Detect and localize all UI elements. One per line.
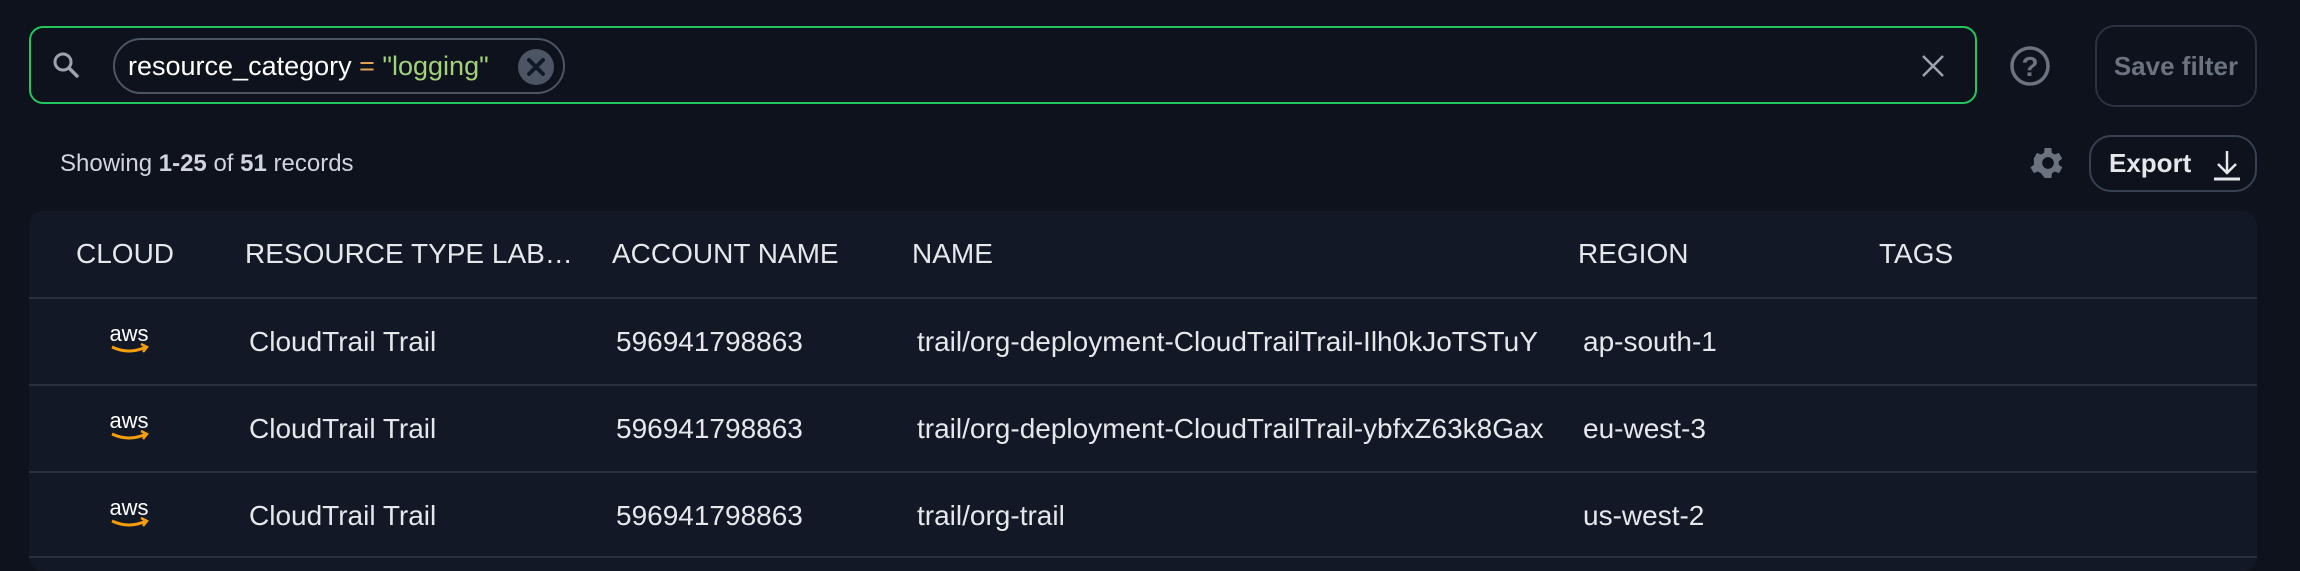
row 2: CloudTrail Trail [249, 413, 436, 444]
row 3: trail/org-trail [917, 500, 1065, 531]
icon: clear [1922, 55, 1944, 77]
search box [29, 26, 1977, 104]
row 1: CloudTrail Trail [249, 326, 436, 357]
row 3: us-west-2 [1583, 500, 1704, 531]
row 1: trail/org-deployment-CloudTrailTrail-Ilh0kJoTSTuY [917, 326, 1538, 357]
export button [2089, 135, 2257, 192]
row 2: eu-west-3 [1583, 413, 1706, 444]
record count: Showing 1-25 of 51 records [60, 150, 354, 177]
row 2 [109, 410, 1706, 444]
table header: CLOUD [76, 238, 174, 269]
row 1 [109, 323, 1717, 357]
row 1: 596941798863 [616, 326, 803, 357]
row 3: 596941798863 [616, 500, 803, 531]
icon: download [2214, 151, 2240, 180]
table header: REGION [1578, 238, 1688, 269]
icon: remove chip [518, 49, 554, 85]
export button: Export [2109, 148, 2191, 178]
icon: help [2010, 46, 2050, 86]
table header: RESOURCE TYPE LAB… [245, 238, 573, 269]
save filter button: Save filter [2114, 51, 2238, 81]
table header: NAME [912, 238, 993, 269]
row 2: 596941798863 [616, 413, 803, 444]
icon: help: ? [2021, 51, 2039, 82]
filter chip [113, 38, 565, 94]
icon: settings gear [2030, 148, 2062, 178]
icon: search [54, 52, 79, 78]
table header: ACCOUNT NAME [612, 238, 839, 269]
table panel [29, 211, 2257, 571]
row 2: trail/org-deployment-CloudTrailTrail-ybfxZ63k8Gax [917, 413, 1544, 444]
table header: TAGS [1879, 238, 1953, 269]
save filter button [2095, 25, 2257, 107]
table header [76, 238, 1953, 269]
row 3 [109, 497, 1704, 531]
filter chip: resource_category = "logging" [128, 51, 489, 81]
row 3: CloudTrail Trail [249, 500, 436, 531]
row 1: ap-south-1 [1583, 326, 1717, 357]
